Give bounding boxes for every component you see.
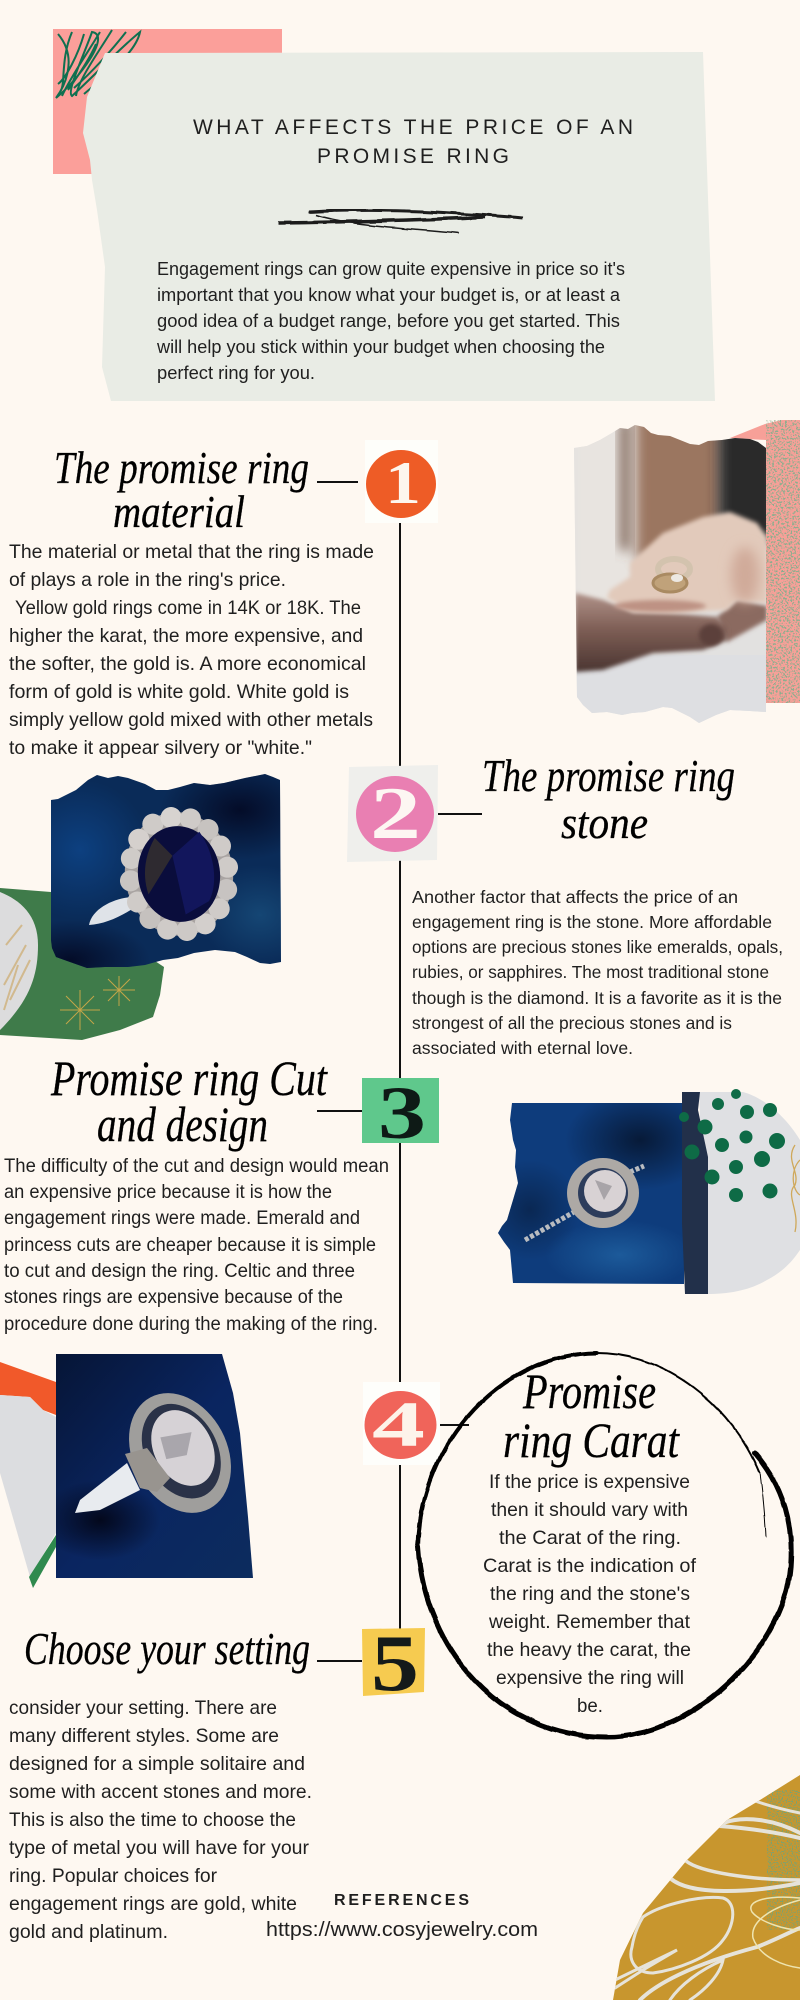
number badge 4: 4 [372,1389,425,1461]
body text: rubies, or sapphires. The most traditional stone [412,962,769,982]
panel: section 1 material [9,410,800,759]
orange, grey and green paper shapes [0,1362,56,1588]
connector [438,813,482,815]
body text [483,1471,697,1717]
body text: then it should vary with [491,1499,688,1521]
heading: and design [97,1096,268,1152]
heading: The promise ring [482,750,735,801]
heading [482,750,735,848]
body text: designed for a simple solitaire and [9,1753,305,1775]
number badge 3 [362,1072,439,1155]
body text: expensive the ring will [496,1667,684,1689]
body text [4,1156,389,1335]
body text: This is also the time to choose the [9,1809,296,1831]
green and grey paper shapes [0,888,164,1040]
body text: the softer, the gold is. A more economical [9,653,366,675]
body text: The difficulty of the cut and design would mean [4,1156,389,1177]
body text: weight. Remember that [488,1611,691,1633]
body text: of plays a role in the ring's price. [9,569,286,591]
intro text: perfect ring for you. [157,363,315,383]
body text: form of gold is white gold. White gold is [9,681,349,703]
panel: section 2 stone [0,750,783,1058]
heading: Promise ring Cut [50,1050,328,1106]
panel: header [53,29,715,401]
number badge 1 [365,440,438,523]
body text: some with accent stones and more. [9,1781,312,1803]
body text: the ring and the stone's [490,1583,690,1605]
body text: princess cuts are cheaper because it is simple [4,1235,376,1256]
number badge 5: 5 [371,1618,419,1708]
intro text: will help you stick within your budget when choosing the [156,337,605,357]
references: REFERENCES [334,1892,469,1909]
body text: Another factor that affects the price of an [412,887,738,907]
body text: procedure done during the making of the ring. [4,1314,378,1335]
navy paper strip [679,1092,720,1294]
photo: hand holding rings [574,425,766,723]
connector [440,1424,469,1426]
connector [317,481,358,483]
grey paper with green dots [699,1089,800,1294]
body text: If the price is expensive [489,1471,690,1493]
heading: ring Carat [503,1412,680,1468]
body text: to cut and design the ring. Celtic and three [4,1261,355,1282]
references: https://www.cosyjewelry.com [266,1919,538,1941]
body text: simply yellow gold mixed with other metals [9,709,373,731]
body text: Carat is the indication of [483,1555,697,1577]
body text: associated with eternal love. [412,1038,633,1058]
photo: sapphire ring [51,774,281,968]
heading: The promise ring [54,442,309,493]
brush circle [418,1353,791,1737]
number badge 2: 2 [370,773,421,855]
body text: strongest of all the precious stones and is [412,1013,732,1033]
number badge 3: 3 [378,1072,426,1155]
scribble divider [278,210,523,233]
body text: consider your setting. There are [9,1697,277,1719]
body text: the Carat of the ring. [499,1527,681,1549]
heading [54,442,309,537]
heading: material [113,486,245,537]
body text: engagement rings are gold, white [9,1893,297,1915]
body text: The material or metal that the ring is made [9,541,374,563]
title: PROMISE RING [317,145,509,168]
body text: many different styles. Some are [9,1725,279,1747]
body text: ring. Popular choices for [9,1865,217,1887]
paper sheet [83,52,715,401]
body text: options are precious stones like emeralds, opals, [412,937,783,957]
halo and stone [120,807,238,941]
title [193,116,633,168]
panel: section 4 carat [0,1353,791,1737]
photo: oval diamond ring [40,1354,256,1580]
number badge 2 [347,765,438,862]
body text [412,887,783,1058]
body text: though is the diamond. It is a favorite as it is the [412,988,782,1008]
body text: to make it appear silvery or "white." [9,737,312,759]
panel: section 3 cut and design [4,1050,800,1335]
heading: Choose your setting [24,1623,310,1674]
body text [9,1697,312,1943]
heading: Promise [522,1363,656,1419]
photo: halo ring [498,1103,684,1284]
pink speckled paper [730,420,800,703]
intro text [156,259,625,383]
ring band [89,897,134,925]
body text: the heavy the carat, the [487,1639,691,1661]
band [525,1166,644,1240]
gold star decorations [60,976,135,1030]
body text: engagement ring is the stone. More affordable [412,912,772,932]
body text: be. [577,1695,603,1717]
timeline line [399,520,401,1632]
number badge 4 [363,1382,440,1465]
body text: higher the karat, the more expensive, and [9,625,363,647]
title: WHAT AFFECTS THE PRICE OF AN [193,116,633,139]
pink torn paper with green scribble [53,29,282,174]
intro text: important that you know what your budget is, or at least a [157,285,621,305]
intro text: good idea of a budget range, before you get started. This [157,311,620,331]
halo [567,1158,639,1228]
decoration: gold circle with white swirls [600,1770,800,2000]
connector [317,1660,362,1662]
heading [503,1363,680,1468]
body text: gold and platinum. [9,1921,168,1943]
intro text: Engagement rings can grow quite expensive in price so it's [157,259,625,279]
body text: engagement rings were made. Emerald and [4,1208,360,1229]
body text: stones rings are expensive because of the [4,1287,343,1308]
panel: section 5 setting [9,1618,425,1943]
body text: type of metal you will have for your [9,1837,309,1859]
number badge 5 [362,1618,425,1708]
references [266,1892,538,1941]
connector [317,1110,362,1112]
number badge 1: 1 [385,450,421,516]
heading [50,1050,328,1152]
body text [9,541,374,759]
heading: stone [561,797,648,848]
rings [653,559,690,592]
body text: Yellow gold rings come in 14K or 18K. The [15,597,361,619]
body text: an expensive price because it is how the [4,1182,332,1203]
